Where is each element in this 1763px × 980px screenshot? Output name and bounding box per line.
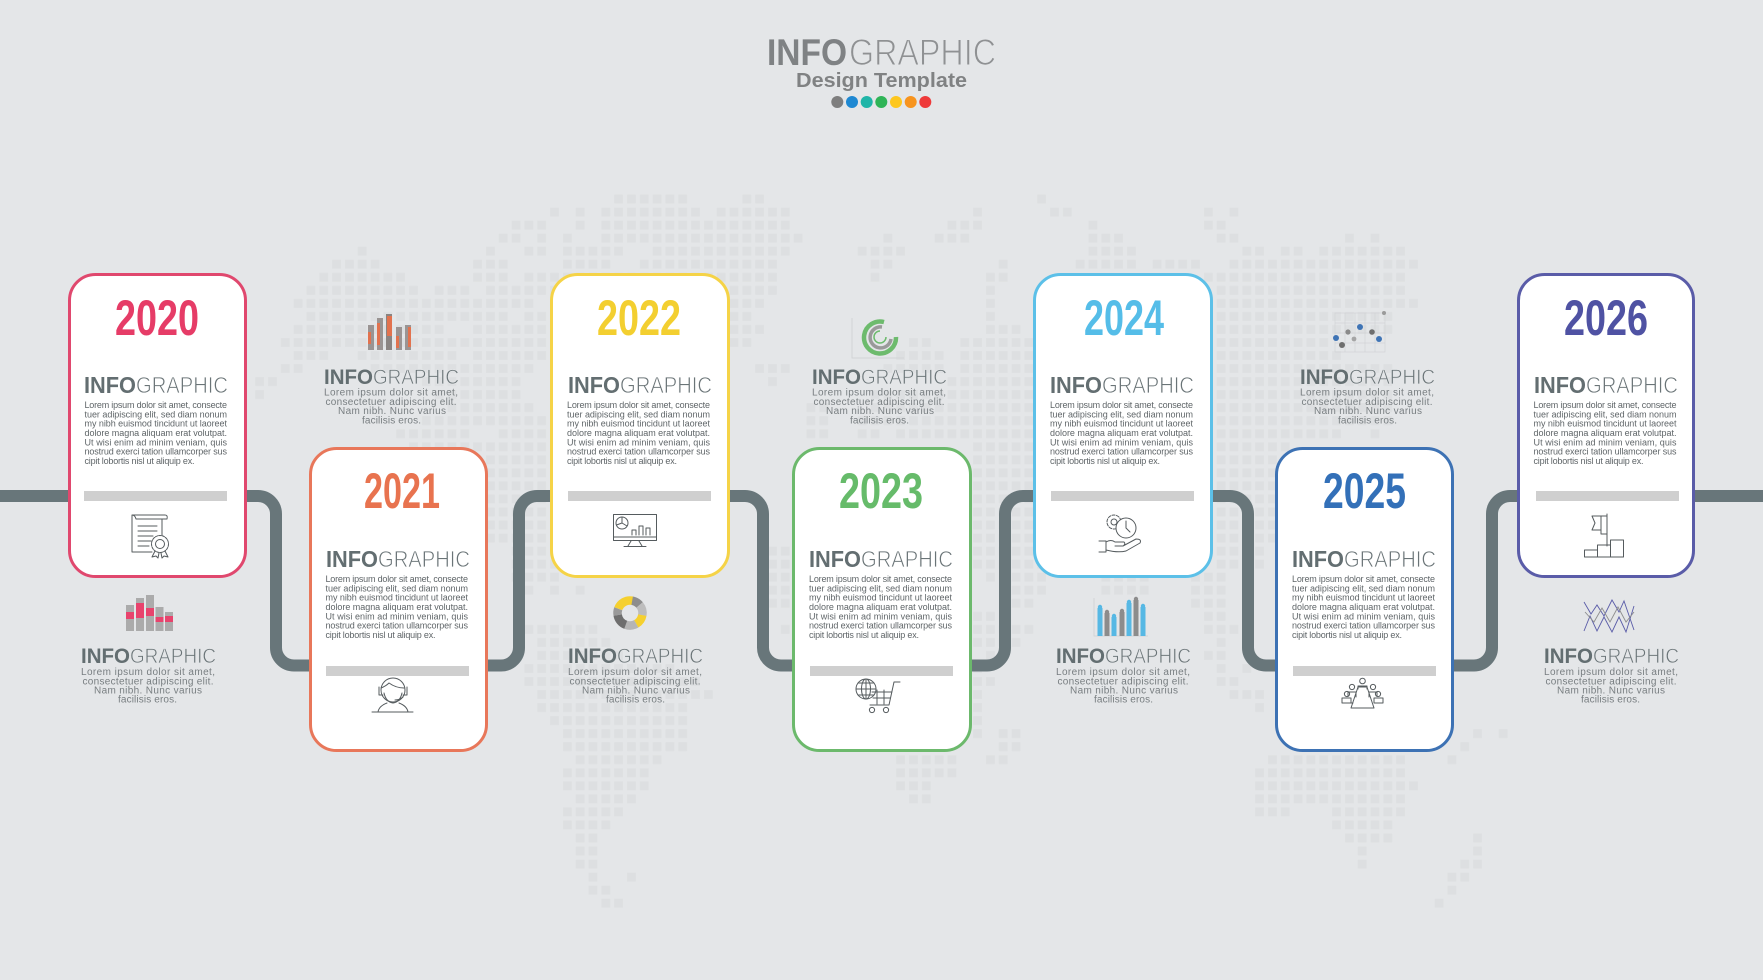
card heading: GRAPHIC	[1102, 372, 1194, 398]
body text: nostrud exerci tation ullamcorper sus	[809, 621, 952, 631]
timeline path	[0, 496, 1763, 666]
side block: orange bar chart	[324, 314, 459, 426]
block heading: GRAPHIC	[617, 644, 703, 668]
block heading: INFO	[324, 365, 373, 389]
body text: my nibh euismod tincidunt ut laoreet	[567, 419, 710, 429]
body text: cipit lobortis nisl ut aliquip ex.	[326, 630, 436, 640]
block heading	[1544, 644, 1679, 668]
body text: Ut wisi enim ad minim veniam, quis	[567, 437, 710, 447]
block text: consectetuer adipiscing elit.	[1302, 397, 1432, 408]
block text	[568, 667, 702, 706]
block text: Lorem ipsum dolor sit amet,	[568, 667, 702, 678]
body text: Ut wisi enim ad minim veniam, quis	[326, 611, 468, 621]
block text: Nam nibh. Nunc varius	[1557, 685, 1665, 696]
body text: nostrud exerci tation ullamcorper sus	[1050, 447, 1194, 457]
panel: 2022	[552, 274, 728, 576]
icon: flag and steps	[1584, 514, 1624, 557]
side block: green swirl chart	[812, 318, 947, 426]
block text: Nam nibh. Nunc varius	[94, 685, 202, 696]
card heading: INFO	[326, 546, 378, 572]
block heading	[568, 644, 703, 668]
block heading	[81, 644, 216, 668]
block text: facilisis eros.	[1094, 695, 1153, 706]
card heading	[1292, 546, 1436, 572]
body text: tuer adipiscing elit, sed diam nonum	[1050, 409, 1193, 419]
body text: Lorem ipsum dolor sit amet, consecte	[1292, 574, 1435, 584]
card heading: INFO	[568, 372, 620, 398]
body text	[1534, 400, 1677, 466]
year: 2022	[597, 290, 681, 346]
body text: Ut wisi enim ad minim veniam, quis	[1050, 437, 1194, 447]
card heading: INFO	[84, 372, 136, 398]
card heading: INFO	[809, 546, 861, 572]
block heading: GRAPHIC	[1593, 644, 1679, 668]
card heading: GRAPHIC	[378, 546, 470, 572]
chart icon	[126, 595, 173, 631]
block heading	[1056, 644, 1191, 668]
block text: consectetuer adipiscing elit.	[814, 397, 944, 408]
heading: INFO	[767, 32, 847, 73]
block heading: GRAPHIC	[130, 644, 216, 668]
icon: certificate	[132, 515, 168, 558]
block heading: INFO	[1544, 644, 1593, 668]
block text: Nam nibh. Nunc varius	[338, 406, 446, 417]
body text: dolore magna aliquam erat volutpat.	[809, 602, 952, 612]
body text: nostrud exerci tation ullamcorper sus	[326, 621, 468, 631]
block text: consectetuer adipiscing elit.	[1546, 676, 1676, 687]
body text: tuer adipiscing elit, sed diam nonum	[1534, 409, 1676, 419]
block text: Nam nibh. Nunc varius	[826, 406, 934, 417]
icon: support headset	[372, 678, 413, 712]
block text: Nam nibh. Nunc varius	[1314, 406, 1422, 417]
card heading: INFO	[1534, 372, 1586, 398]
gray bar	[1536, 491, 1679, 501]
body text: Lorem ipsum dolor sit amet, consecte	[809, 574, 952, 584]
body text: Lorem ipsum dolor sit amet, consecte	[567, 400, 710, 410]
block text	[1544, 667, 1678, 706]
card heading: INFO	[1050, 372, 1102, 398]
gray bar	[326, 666, 469, 676]
body text: cipit lobortis nisl ut aliquip ex.	[1050, 456, 1160, 466]
body text: dolore magna aliquam erat volutpat.	[1050, 428, 1193, 438]
block text: consectetuer adipiscing elit.	[570, 676, 700, 687]
side block: purple line chart	[1544, 600, 1679, 706]
year: 2024	[1084, 290, 1164, 346]
donut icon	[612, 595, 648, 631]
gray bar	[84, 491, 227, 501]
block text: Nam nibh. Nunc varius	[582, 685, 690, 696]
year: 2021	[364, 463, 440, 519]
block text	[324, 388, 458, 426]
gray bar	[1293, 666, 1436, 676]
block heading: INFO	[568, 644, 617, 668]
body text: my nibh euismod tincidunt ut laoreet	[1534, 419, 1677, 429]
block text	[81, 667, 215, 706]
body text: nostrud exerci tation ullamcorper sus	[1292, 621, 1436, 631]
body text: my nibh euismod tincidunt ut laoreet	[1050, 419, 1193, 429]
block text: Lorem ipsum dolor sit amet,	[1056, 667, 1190, 678]
body text: Ut wisi enim ad minim veniam, quis	[809, 611, 952, 621]
body text: cipit lobortis nisl ut aliquip ex.	[1292, 630, 1402, 640]
body text: nostrud exerci tation ullamcorper sus	[84, 447, 228, 457]
card heading	[568, 372, 712, 398]
card heading	[326, 546, 470, 572]
body text	[809, 574, 952, 640]
body text: dolore magna aliquam erat volutpat.	[567, 428, 710, 438]
block text	[812, 388, 946, 426]
body text: tuer adipiscing elit, sed diam nonum	[326, 583, 468, 593]
card heading: GRAPHIC	[861, 546, 953, 572]
block heading	[812, 365, 947, 389]
body text	[84, 400, 228, 466]
body text: my nibh euismod tincidunt ut laoreet	[1292, 593, 1435, 603]
card heading	[84, 372, 228, 398]
body text: cipit lobortis nisl ut aliquip ex.	[84, 456, 194, 466]
body text: nostrud exerci tation ullamcorper sus	[1534, 447, 1677, 457]
icon: monitor chart	[614, 514, 656, 546]
block text: Lorem ipsum dolor sit amet,	[812, 388, 946, 398]
body text: Lorem ipsum dolor sit amet, consecte	[84, 400, 227, 410]
block text: Lorem ipsum dolor sit amet,	[324, 388, 458, 398]
body text: cipit lobortis nisl ut aliquip ex.	[1534, 456, 1644, 466]
body text: dolore magna aliquam erat volutpat.	[326, 602, 468, 612]
block text: Nam nibh. Nunc varius	[1070, 685, 1178, 696]
block text: Lorem ipsum dolor sit amet,	[1544, 667, 1678, 678]
panel: 2024	[1034, 274, 1212, 576]
block text: consectetuer adipiscing elit.	[326, 397, 456, 408]
chart icon	[368, 314, 411, 350]
block heading: GRAPHIC	[1105, 644, 1191, 668]
side block: pink bar chart	[81, 595, 216, 706]
block text: facilisis eros.	[362, 415, 421, 426]
body text: tuer adipiscing elit, sed diam nonum	[1292, 583, 1435, 593]
card heading: INFO	[1292, 546, 1344, 572]
side block: blue bar chart	[1056, 597, 1191, 706]
block text: facilisis eros.	[1338, 415, 1397, 426]
body text: Ut wisi enim ad minim veniam, quis	[1292, 611, 1436, 621]
side block: scatter plot	[1300, 311, 1435, 426]
card heading: GRAPHIC	[136, 372, 228, 398]
gray bar	[568, 491, 711, 501]
swirl icon	[852, 318, 904, 358]
scatter icon	[1333, 311, 1386, 352]
side block: yellow donut chart	[568, 595, 703, 706]
block text: facilisis eros.	[118, 695, 177, 706]
block text: facilisis eros.	[606, 695, 665, 706]
body text: Lorem ipsum dolor sit amet, consecte	[1050, 400, 1193, 410]
icon: globe and cart	[856, 679, 900, 713]
block heading: INFO	[812, 365, 861, 389]
colour dots	[831, 96, 931, 108]
block heading: GRAPHIC	[1349, 365, 1435, 389]
block heading: INFO	[81, 644, 130, 668]
chart icon	[1094, 597, 1148, 636]
block text: consectetuer adipiscing elit.	[1058, 676, 1188, 687]
panel: 2020	[70, 274, 246, 576]
body text	[1050, 400, 1194, 466]
body text: tuer adipiscing elit, sed diam nonum	[567, 409, 710, 419]
block heading: INFO	[1300, 365, 1349, 389]
gray bar	[810, 666, 953, 676]
year: 2023	[839, 463, 923, 519]
panel: 2023	[794, 448, 970, 750]
body text: my nibh euismod tincidunt ut laoreet	[84, 419, 227, 429]
body text: Lorem ipsum dolor sit amet, consecte	[1534, 400, 1676, 410]
body text: dolore magna aliquam erat volutpat.	[1534, 428, 1676, 438]
block heading: GRAPHIC	[373, 365, 459, 389]
icon: hand, gear and clock	[1099, 515, 1140, 552]
heading	[767, 32, 996, 73]
body text: dolore magna aliquam erat volutpat.	[84, 428, 227, 438]
panel: 2021	[310, 448, 486, 750]
dotted world map	[253, 192, 1510, 910]
body text: my nibh euismod tincidunt ut laoreet	[326, 593, 468, 603]
body text: Lorem ipsum dolor sit amet, consecte	[326, 574, 468, 584]
year: 2025	[1323, 463, 1406, 519]
year: 2020	[115, 290, 199, 346]
body text: cipit lobortis nisl ut aliquip ex.	[567, 456, 677, 466]
body text: my nibh euismod tincidunt ut laoreet	[809, 593, 952, 603]
card heading	[1534, 372, 1678, 398]
body text: tuer adipiscing elit, sed diam nonum	[809, 583, 952, 593]
panel: 2026	[1518, 274, 1694, 576]
body text: tuer adipiscing elit, sed diam nonum	[84, 409, 227, 419]
card heading	[809, 546, 953, 572]
subtitle: Design Template	[796, 70, 967, 92]
body text: cipit lobortis nisl ut aliquip ex.	[809, 630, 919, 640]
year: 2026	[1564, 290, 1648, 346]
title	[767, 32, 996, 108]
block heading	[1300, 365, 1435, 389]
card heading	[1050, 372, 1194, 398]
block text: facilisis eros.	[850, 415, 909, 426]
card heading: GRAPHIC	[1586, 372, 1678, 398]
card heading: GRAPHIC	[1344, 546, 1436, 572]
block text: Lorem ipsum dolor sit amet,	[81, 667, 215, 678]
heading: GRAPHIC	[849, 32, 996, 73]
block text: consectetuer adipiscing elit.	[82, 676, 214, 687]
body text: Ut wisi enim ad minim veniam, quis	[1534, 437, 1677, 447]
body text: nostrud exerci tation ullamcorper sus	[567, 447, 710, 457]
panel: 2025	[1276, 448, 1452, 750]
icon: meeting table	[1342, 678, 1383, 708]
block heading: GRAPHIC	[861, 365, 947, 389]
block text: Lorem ipsum dolor sit amet,	[1300, 388, 1434, 398]
block heading: INFO	[1056, 644, 1105, 668]
block heading	[324, 365, 459, 389]
card heading: GRAPHIC	[620, 372, 712, 398]
body text	[326, 574, 468, 640]
block text	[1300, 388, 1434, 426]
line chart icon	[1584, 600, 1634, 632]
block text	[1056, 667, 1190, 706]
body text: dolore magna aliquam erat volutpat.	[1292, 602, 1435, 612]
body text	[567, 400, 710, 466]
gray bar	[1051, 491, 1194, 501]
body text: Ut wisi enim ad minim veniam, quis	[84, 437, 228, 447]
body text	[1292, 574, 1436, 640]
block text: facilisis eros.	[1581, 695, 1640, 706]
